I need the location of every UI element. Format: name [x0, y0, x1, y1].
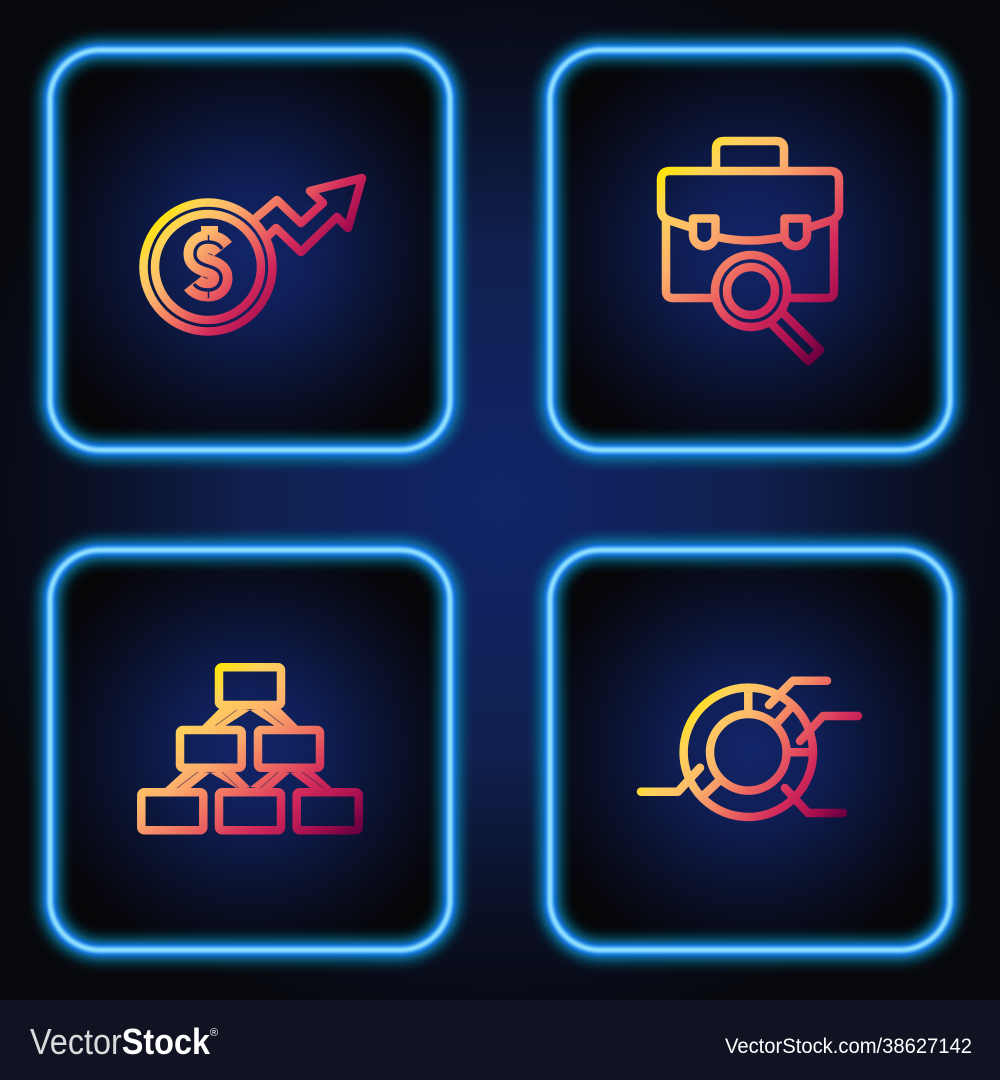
icon: briefcase with magnifier — [661, 141, 839, 361]
panel: hierarchy — [50, 550, 450, 950]
icon: ring chart with callouts — [641, 681, 858, 817]
panel: pie chart — [550, 550, 950, 950]
image id url: VectorStock.com/38627142 — [725, 1035, 972, 1058]
icon: coin with rising arrow — [144, 178, 362, 332]
panel: dollar growth — [50, 50, 450, 450]
icon: organisation chart — [141, 667, 359, 830]
neon frame: bottom right — [550, 550, 950, 950]
panel: briefcase search — [550, 50, 950, 450]
logo: VectorStock: VectorStock — [30, 1021, 211, 1062]
neon frame: bottom left — [50, 550, 450, 950]
registered mark: ® — [210, 1027, 218, 1039]
neon frame: top right — [550, 50, 950, 450]
footer bar — [0, 1000, 1000, 1080]
neon frame: top left — [50, 50, 450, 450]
